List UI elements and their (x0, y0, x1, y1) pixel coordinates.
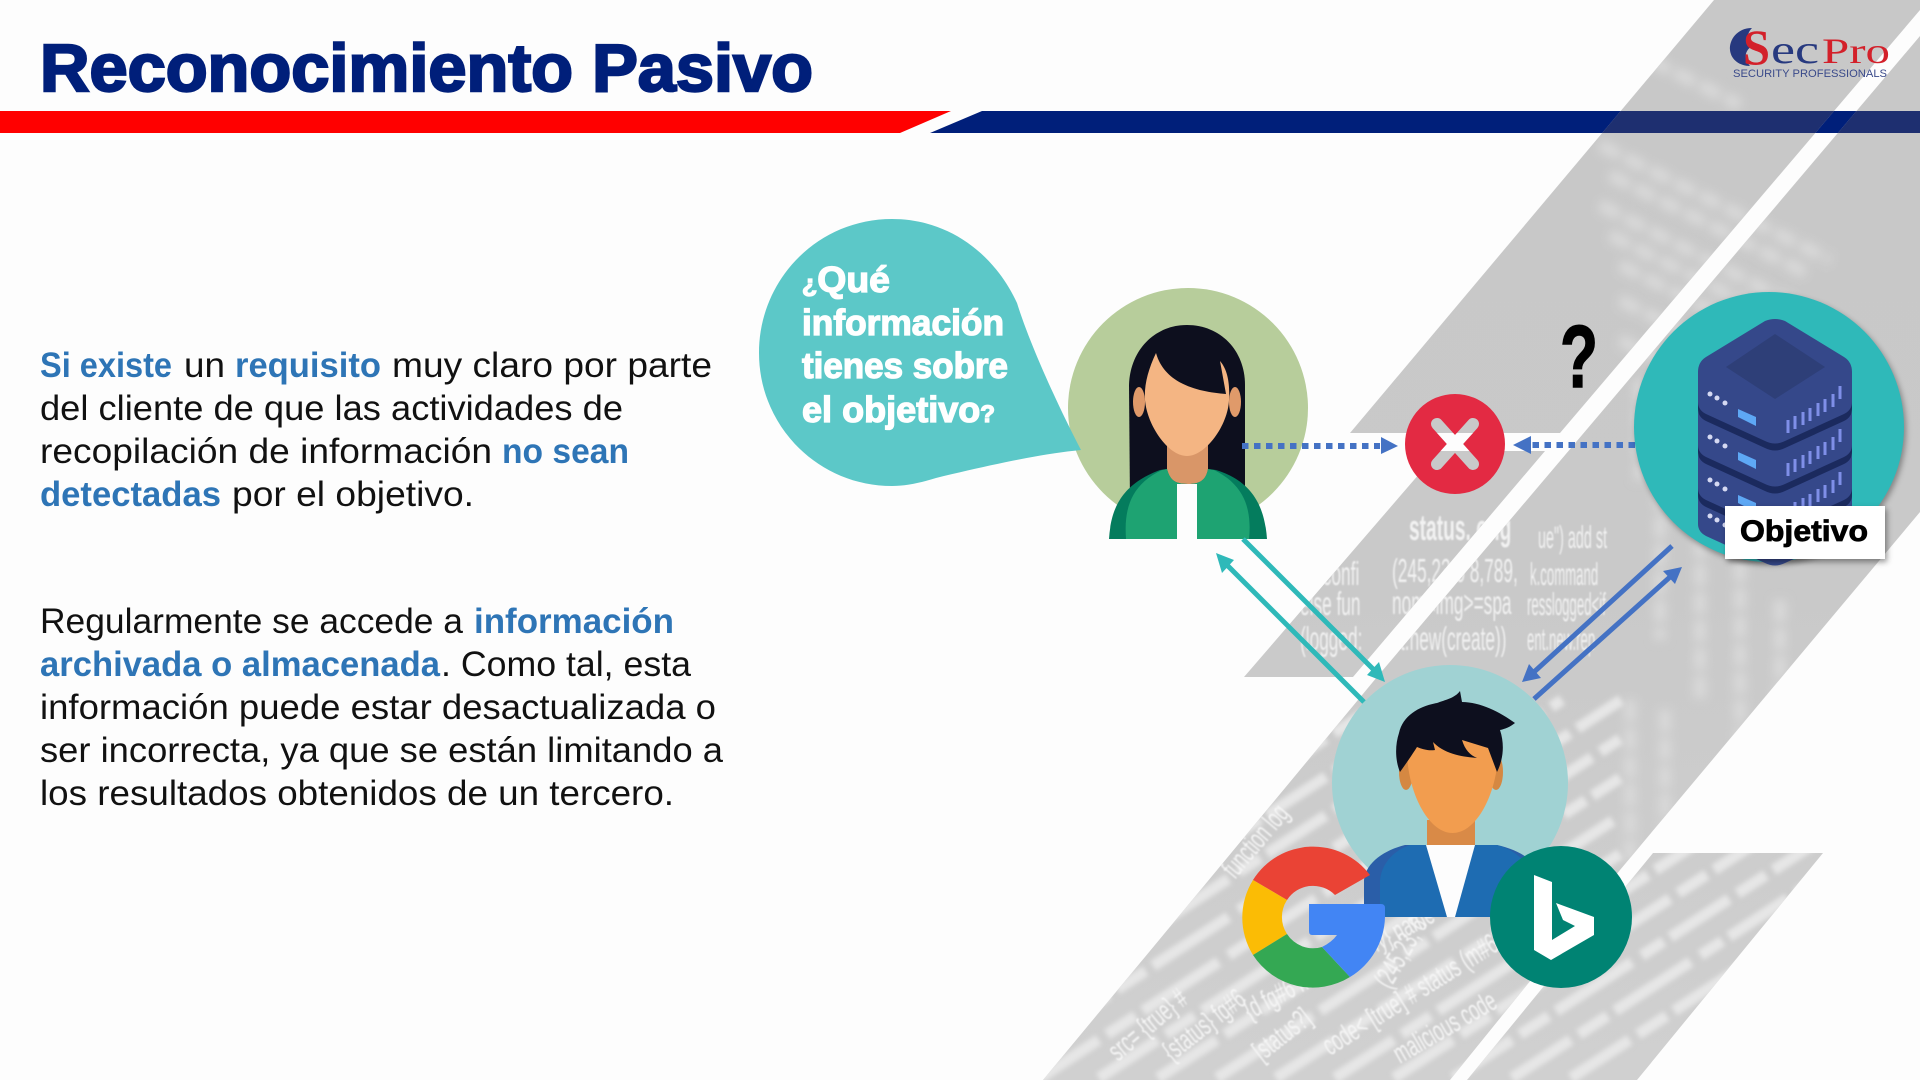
text block: requisito del cliente: por el objetivo. (232, 475, 474, 514)
background: diagonal code bands: {status} fg#6 (1157, 984, 1252, 1068)
background: diagonal code bands: .confi (1318, 555, 1359, 593)
speech bubble (759, 219, 1081, 486)
text block: información archivada: los resultados obtenidos de un tercero. (40, 774, 674, 813)
text block: información archivada (40, 602, 724, 813)
arrow: woman to man (1243, 539, 1385, 682)
background: diagonal code bands: k.command (1530, 558, 1598, 593)
label: Objetivo: Objetivo (1740, 515, 1868, 548)
text block: requisito del cliente: requisito (235, 346, 381, 385)
background: diagonal code bands: ue") add st (1538, 521, 1607, 556)
background: diagonal code bands: t.new(create)) (1400, 620, 1507, 658)
arrow: target to man (1522, 546, 1672, 682)
arrow: man to target (1534, 567, 1682, 699)
logo: SecPro: SECURITY PROFESSIONALS (1733, 68, 1887, 80)
text block: información archivada: . Como tal, esta (441, 645, 692, 684)
arrow: woman to blocked (1242, 437, 1398, 454)
header bar: navy (930, 111, 1920, 133)
speech bubble: información (802, 302, 1004, 343)
icon: blocked red X (1405, 394, 1505, 494)
text block: información archivada: información puede estar desactualizada o (40, 688, 716, 727)
text block: requisito del cliente (40, 346, 712, 514)
speech bubble: ¿Qué (802, 259, 890, 300)
background: diagonal code bands: (245,23, 6 8 (1368, 900, 1440, 993)
background: diagonal code bands: function logged (1347, 737, 1429, 853)
text block: información archivada: ser incorrecta, ya que se están limitando a (40, 731, 724, 770)
background: diagonal code bands: (245,23,6 8,789, (1392, 552, 1518, 590)
icon: Bing (1490, 846, 1632, 988)
background: diagonal code bands: (logged: (1300, 620, 1362, 658)
icon: server target (1634, 292, 1904, 566)
logo: SecPro: S (1743, 19, 1770, 75)
icon: question mark: ? (1560, 307, 1598, 406)
text block: información archivada: Regularmente se accede a (40, 602, 464, 641)
arrow: target to blocked (1513, 436, 1635, 454)
text block: información archivada: archivada o almacenada (40, 645, 441, 684)
logo: SecPro: Pro (1822, 31, 1890, 71)
title: Reconocimiento Pasivo (40, 31, 813, 106)
text block: requisito del cliente: recopilación de información (40, 432, 492, 471)
header bar: red (0, 111, 951, 133)
text block: requisito del cliente: Si existe (40, 346, 172, 385)
text block: requisito del cliente: un (184, 346, 225, 385)
text block: requisito del cliente: no sean (502, 432, 629, 471)
background: diagonal code bands: {d fg#6 mn4:h61l84y} name<i g> s an (1239, 864, 1507, 1026)
speech bubble: el objetivo? (802, 389, 995, 430)
icon: woman avatar (1068, 288, 1308, 539)
text block: requisito del cliente: muy claro por parte (392, 346, 712, 385)
arrow: man to woman (1216, 553, 1364, 702)
background: diagonal code bands (1000, 0, 1920, 1080)
background: diagonal code bands: status. ong (1409, 509, 1511, 549)
background: diagonal code bands: else fun (1300, 585, 1360, 623)
icon: man avatar (1332, 665, 1568, 917)
text block: requisito del cliente: detectadas (40, 475, 221, 514)
logo: SecPro: ec (1771, 27, 1819, 72)
background: diagonal code bands: malicious code (1388, 986, 1503, 1070)
background: diagonal code bands: nom<img>=spa (1392, 584, 1512, 622)
speech bubble: tienes sobre (802, 345, 1008, 386)
navy bar seen through band (1602, 111, 1920, 133)
icon: Google (1242, 847, 1385, 988)
background: diagonal code bands: code< [true] # status (m#6 (1317, 929, 1504, 1062)
label: Objetivo (1725, 506, 1885, 559)
logo: SecPro (1730, 19, 1890, 80)
background: diagonal code bands: [status?] (1247, 1003, 1318, 1068)
background: diagonal code bands: function log (1215, 798, 1295, 884)
background: diagonal code bands: src= {true} # (1102, 983, 1195, 1068)
text block: requisito del cliente: del cliente de que las actividades de (40, 389, 623, 428)
text block: información archivada: información (474, 602, 674, 641)
background: diagonal code bands: ent.new.rep (1527, 623, 1595, 658)
background: diagonal code bands: resslogged<if (1527, 588, 1606, 623)
